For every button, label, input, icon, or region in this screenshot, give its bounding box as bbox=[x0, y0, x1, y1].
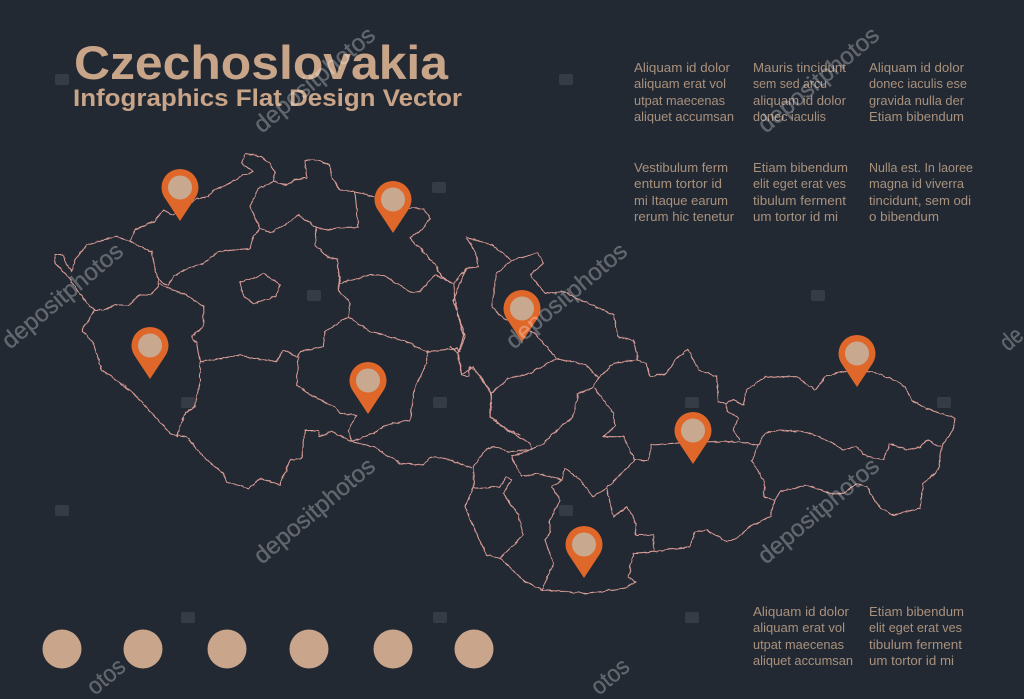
text block: row 2 column 1: entum tortor id bbox=[634, 177, 722, 191]
subtitle: Infographics Flat Design Vector bbox=[73, 85, 462, 112]
icon: pin 3 bbox=[504, 290, 540, 342]
icon: pin 8 bbox=[566, 526, 602, 578]
text block: row 2 column 2: elit eget erat ves bbox=[753, 177, 846, 191]
text block: row 2 column 3: magna id viverra bbox=[869, 177, 964, 191]
text block: row 1 column 2: Mauris tincidunt bbox=[753, 61, 847, 75]
map: Czech west regions bbox=[55, 154, 520, 488]
text block: row 2 column 3: tincidunt, sem odi bbox=[869, 194, 971, 208]
text block: row 2 column 3 bbox=[869, 161, 973, 224]
text block: row 1 column 2: sem sed arcu bbox=[753, 77, 827, 91]
text block: row 2 column 3: Nulla est. In laoree bbox=[869, 161, 973, 175]
text block: row 2 column 2: um tortor id mi bbox=[753, 210, 838, 224]
text block: bottom column 2: tibulum ferment bbox=[869, 638, 963, 652]
text block: row 1 column 3: Aliquam id dolor bbox=[869, 61, 964, 75]
text block: row 1 column 3: donec iaculis ese bbox=[869, 77, 967, 91]
text block: row 1 column 1: Aliquam id dolor bbox=[634, 61, 730, 75]
text block: row 2 column 2: tibulum ferment bbox=[753, 194, 847, 208]
icon: pin 1 bbox=[162, 169, 198, 221]
text block: bottom column 1 bbox=[753, 605, 853, 668]
text block: row 2 column 2 bbox=[753, 161, 848, 224]
icon: pin 4 bbox=[132, 327, 168, 379]
text block: row 1 column 1: aliquam erat vol bbox=[634, 77, 726, 91]
text block: bottom column 2: um tortor id mi bbox=[869, 654, 954, 668]
text block: row 1 column 2: aliquam id dolor bbox=[753, 94, 846, 108]
icon: pin 5 bbox=[350, 362, 386, 414]
title bbox=[73, 36, 462, 112]
icon: pin 6 bbox=[674, 412, 712, 464]
text block: bottom column 2: Etiam bibendum bbox=[869, 605, 964, 619]
text block: row 1 column 1: utpat maecenas bbox=[634, 94, 725, 108]
text block: row 2 column 2: Etiam bibendum bbox=[753, 161, 848, 175]
watermarks: depositphotos bbox=[249, 452, 381, 570]
text block: row 2 column 1 bbox=[634, 161, 734, 224]
text block: bottom column 1: Aliquam id dolor bbox=[753, 605, 849, 619]
text block: row 2 column 3: o bibendum bbox=[869, 210, 939, 224]
title: Czechoslovakia bbox=[74, 36, 449, 89]
text block: row 1 column 1: aliquet accumsan bbox=[634, 110, 734, 124]
text block: row 1 column 3 bbox=[869, 61, 967, 124]
text block: row 1 column 1 bbox=[634, 61, 734, 124]
text block: bottom column 2: elit eget erat ves bbox=[869, 621, 962, 635]
watermarks: depositphotos bbox=[501, 237, 633, 355]
camera watermark icons bbox=[55, 74, 951, 623]
icon: pin 7 bbox=[838, 335, 876, 387]
map: Moravia and Slovakia regions bbox=[450, 237, 955, 593]
text block: row 2 column 1: rerum hic tenetur bbox=[634, 210, 734, 224]
text block: bottom column 1: aliquet accumsan bbox=[753, 654, 853, 668]
icon: pin 2 bbox=[374, 181, 412, 233]
map pins bbox=[132, 169, 876, 578]
watermarks: depositphotos bbox=[0, 237, 129, 355]
text block: row 1 column 2 bbox=[753, 61, 847, 124]
text block: bottom column 1: aliquam erat vol bbox=[753, 621, 845, 635]
text block: bottom column 1: utpat maecenas bbox=[753, 638, 844, 652]
text block: row 2 column 1: Vestibulum ferm bbox=[634, 161, 728, 175]
legend dots bbox=[42, 630, 494, 668]
watermarks: depositphotos bbox=[753, 21, 885, 139]
watermarks: depositphotos bbox=[753, 452, 885, 570]
text block: row 2 column 1: mi Itaque earum bbox=[634, 194, 728, 208]
watermarks: depositphotos bbox=[249, 21, 381, 139]
map of Czechoslovakia regions bbox=[55, 154, 955, 593]
text block: row 1 column 3: gravida nulla der bbox=[869, 94, 964, 108]
text block: row 1 column 2: donec iaculis bbox=[753, 110, 826, 124]
text block: bottom column 2 bbox=[869, 605, 964, 668]
text block: row 1 column 3: Etiam bibendum bbox=[869, 110, 964, 124]
